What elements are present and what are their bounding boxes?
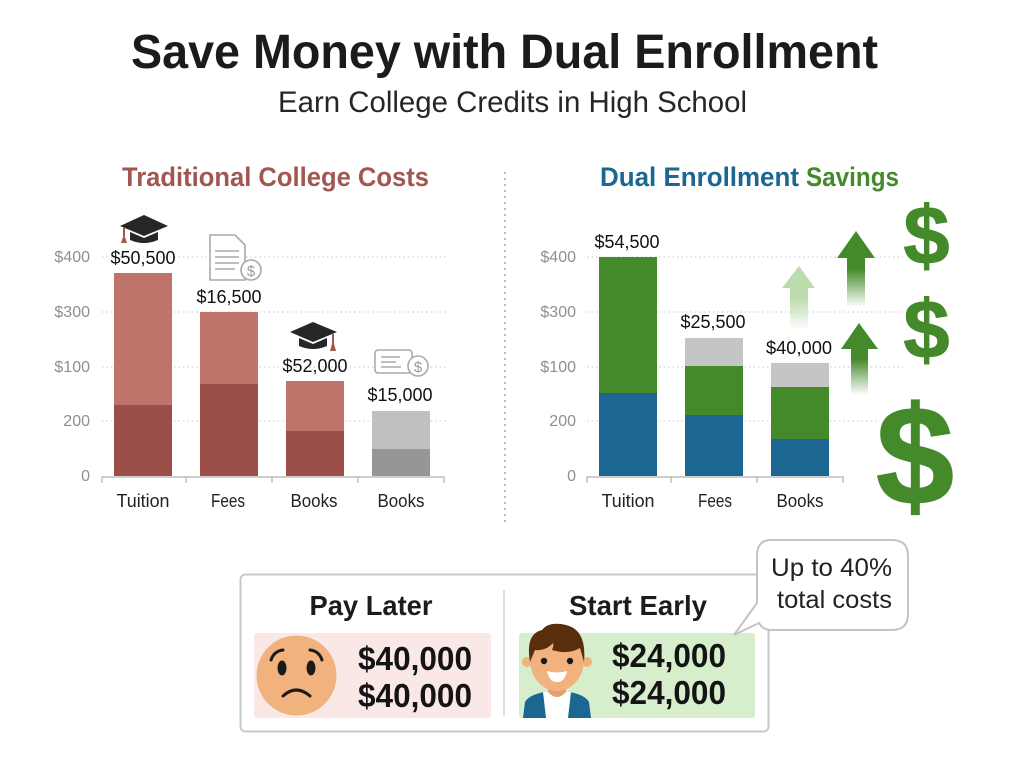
panel: comparison <box>240 574 768 732</box>
icon: receipt with dollar: $ <box>414 359 423 376</box>
icon: dollar sign middle: $ <box>903 283 950 376</box>
bar chart: traditional costs: $100 <box>54 359 90 376</box>
callout: up to 40%: total costs <box>777 586 892 614</box>
icon: receipt with dollar <box>375 350 428 376</box>
heading accent: savings: Savings <box>806 162 899 192</box>
icon: dollar sign top: $ <box>903 189 950 282</box>
bar chart: dual enrollment: 200 <box>549 413 576 430</box>
bar chart: traditional costs: Fees <box>211 491 245 511</box>
bar chart: dual enrollment: $54,500 <box>594 231 660 252</box>
start early amounts: $24,000 <box>612 674 726 711</box>
pay later amounts: $40,000 <box>358 640 472 677</box>
icon: smiling student <box>522 624 592 718</box>
callout: up to 40% <box>734 540 908 635</box>
title: Save Money with Dual Enrollment <box>131 26 878 79</box>
panel: dual enrollment savings <box>540 162 954 534</box>
heading: start early: Start Early <box>569 590 707 621</box>
bar chart: traditional costs: $52,000 <box>282 355 348 376</box>
icon: graduation cap <box>120 215 168 243</box>
subtitle: Earn College Credits in High School <box>278 86 747 119</box>
heading: dual enrollment savings: Dual Enrollment <box>600 162 799 192</box>
bar chart: dual enrollment: $40,000 <box>766 337 832 358</box>
bar chart: traditional costs: 0 <box>81 468 90 485</box>
bar chart: traditional costs: $15,000 <box>368 384 432 405</box>
bar chart: traditional costs: Books <box>290 491 338 511</box>
arrow: up lower <box>841 323 878 395</box>
bar chart: dual enrollment: $100 <box>540 359 576 376</box>
icon: document with dollar <box>210 235 261 280</box>
icon: dollar sign large: $ <box>876 377 954 534</box>
bar chart: traditional costs: $300 <box>54 304 90 321</box>
bar chart: traditional costs: 200 <box>63 413 90 430</box>
bar chart: dual enrollment: $300 <box>540 304 576 321</box>
start early amounts: $24,000 <box>612 637 726 674</box>
bar chart: traditional costs: $16,500 <box>196 286 262 307</box>
bar chart: dual enrollment: $400 <box>540 249 576 266</box>
bar chart: dual enrollment: $25,500 <box>680 311 746 332</box>
bar chart: dual enrollment <box>540 231 903 511</box>
start early amounts <box>612 637 726 711</box>
icon: document with dollar: $ <box>247 263 256 280</box>
bar chart: traditional costs: Books <box>378 491 424 511</box>
bar chart: traditional costs: $50,500 <box>110 247 176 268</box>
pay later amounts <box>358 640 472 714</box>
bar chart: dual enrollment: Fees <box>698 491 732 511</box>
arrow: up large <box>837 231 875 307</box>
bar chart: dual enrollment: Tuition <box>602 491 654 511</box>
bar chart: traditional costs: $400 <box>54 249 90 266</box>
pay later box <box>254 633 491 718</box>
heading: pay later: Pay Later <box>310 590 433 621</box>
bar chart: traditional costs: Tuition <box>116 491 170 511</box>
bar chart: dual enrollment: Books <box>776 491 824 511</box>
callout: up to 40%: Up to 40% <box>771 554 892 582</box>
icon: sad face <box>256 636 336 716</box>
center divider <box>504 172 506 522</box>
pay later amounts: $40,000 <box>358 677 472 714</box>
bar chart: dual enrollment: 0 <box>567 468 576 485</box>
bar chart: traditional costs <box>54 247 446 511</box>
icon: graduation cap <box>290 322 337 351</box>
arrow: light up <box>782 266 815 330</box>
panel: traditional college costs <box>54 162 446 511</box>
heading: traditional college costs: Traditional College Costs <box>122 162 429 192</box>
start early box <box>519 633 755 718</box>
